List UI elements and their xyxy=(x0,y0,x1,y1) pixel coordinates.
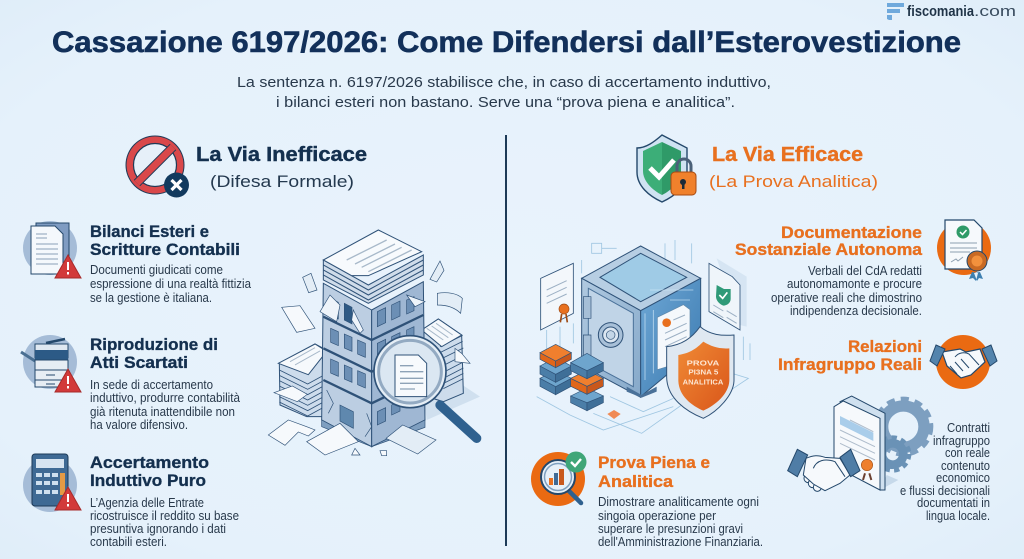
text block: economico xyxy=(936,471,990,485)
text block: dell'Amministrazione Finanziaria. xyxy=(598,535,763,549)
text block xyxy=(778,337,922,374)
text block xyxy=(735,223,923,318)
icon: shield with lock xyxy=(637,135,696,202)
right document xyxy=(709,258,747,330)
text block: lingua locale. xyxy=(926,509,990,523)
panel: la via efficace xyxy=(531,135,997,549)
orange shield: ANALITICA xyxy=(683,377,724,386)
text block: superare le presunzioni gravi xyxy=(598,522,743,536)
text block xyxy=(900,421,990,523)
text block xyxy=(598,453,763,549)
text block: contabili esteri. xyxy=(90,535,167,549)
orange shield xyxy=(667,327,734,418)
text block: Accertamento xyxy=(90,453,209,472)
document in safe xyxy=(657,305,690,370)
text block: Verbali del CdA redatti xyxy=(808,264,922,278)
paper pile on top xyxy=(323,230,423,303)
text block: Atti Scartati xyxy=(90,353,188,372)
logo: fiscomania.com: .com xyxy=(974,4,1016,20)
subheading: la prova analitica: (La Prova Analitica) xyxy=(709,172,878,191)
intro text: i bilanci esteri non bastano. Serve una “prova piena e analitica”. xyxy=(276,94,735,111)
loose papers xyxy=(268,261,462,456)
text block: operative reali che dimostrino xyxy=(771,291,922,305)
illustration: digital safe with orange shield xyxy=(537,240,750,433)
icon: calculator with warning xyxy=(23,454,81,512)
text block: Dimostrare analiticamente ogni xyxy=(598,495,759,509)
text block xyxy=(90,222,251,305)
text block: con reale xyxy=(945,446,990,460)
text block: L’Agenzia delle Entrate xyxy=(90,496,204,510)
right paper stack xyxy=(422,319,470,402)
item: riproduzione atti xyxy=(21,335,240,432)
text block: In sede di accertamento xyxy=(90,378,213,392)
text block: infragruppo xyxy=(933,434,990,448)
safe xyxy=(582,246,701,398)
left document xyxy=(541,263,573,330)
title: Cassazione 6197/2026: Come Difendersi dall’Esterovestizione xyxy=(52,26,961,59)
item: accertamento induttivo xyxy=(23,453,239,549)
logo: fiscomania.com xyxy=(887,3,1016,20)
text block xyxy=(90,453,239,549)
text block: Prova Piena e xyxy=(598,453,710,472)
icon: certified document xyxy=(937,220,991,281)
text block: Relazioni xyxy=(848,337,922,356)
orange shield: PROVA xyxy=(687,358,720,367)
text block: presuntiva ignorando i dati xyxy=(90,522,226,536)
item: relazioni infragruppo xyxy=(778,335,997,389)
text block: già ritenuta inattendibile non xyxy=(90,405,235,419)
text block: ha valore difensivo. xyxy=(90,418,188,432)
panel: la via inefficace xyxy=(21,136,480,549)
heading: la via inefficace: La Via Inefficace xyxy=(196,144,367,166)
text block: Infragruppo Reali xyxy=(778,355,922,374)
text block: se la gestione è italiana. xyxy=(90,291,212,305)
logo: fiscomania.com: fiscomania xyxy=(907,4,975,20)
central divider xyxy=(505,135,507,546)
text block: Scritture Contabili xyxy=(90,240,240,259)
illustration: crumbling building of papers with magnifier xyxy=(268,230,480,456)
text block: indipendenza decisionale. xyxy=(790,304,922,318)
left paper stack xyxy=(274,344,327,417)
icon: magnifier with chart xyxy=(531,452,586,506)
text block: Analitica xyxy=(598,472,674,491)
building xyxy=(320,282,425,447)
text block: Riproduzione di xyxy=(90,335,218,354)
icon: prohibition sign xyxy=(126,136,189,198)
text block xyxy=(90,335,240,432)
item: prova piena xyxy=(531,452,763,549)
icon: handshake xyxy=(930,335,997,389)
text block: Contratti xyxy=(947,421,990,435)
text block: Documenti giudicati come xyxy=(90,263,223,277)
text block: singoia operazione per xyxy=(598,509,716,523)
intro text: La sentenza n. 6197/2026 stabilisce che, in caso di accertamento induttivo, xyxy=(237,74,771,91)
orange shield: PI3NA 5 xyxy=(688,368,719,377)
text block: induttivo, produrre contabilità xyxy=(90,391,240,405)
data blocks xyxy=(540,344,621,419)
text block: autonomamonte e procure xyxy=(787,277,922,291)
magnifier xyxy=(374,336,477,438)
circuit lines xyxy=(537,240,750,433)
item: documentazione sostanziale xyxy=(735,220,991,318)
text block: e flussi decisionali xyxy=(900,484,990,498)
icon: documents with warning xyxy=(23,221,81,278)
item: contratti infragruppo xyxy=(788,396,990,523)
text block: ricostruisce il reddito su base xyxy=(90,509,239,523)
intro text xyxy=(237,74,771,111)
illustration: contract, gears, handshake xyxy=(788,396,931,491)
heading: la via efficace: La Via Efficace xyxy=(712,144,863,166)
text block: Bilanci Esteri e xyxy=(90,222,209,241)
icon: copier with warning xyxy=(21,335,81,392)
text block: espressione di una realtà fittizia xyxy=(90,277,251,291)
text block: documentati in xyxy=(917,496,990,510)
text block: Documentazione xyxy=(781,223,922,242)
text block: Induttivo Puro xyxy=(90,471,206,490)
text block: contenuto xyxy=(941,459,990,473)
text block: Sostanziale Autonoma xyxy=(735,240,923,259)
subheading: difesa formale: (Difesa Formale) xyxy=(210,172,354,191)
item: bilanci esteri xyxy=(23,221,251,305)
